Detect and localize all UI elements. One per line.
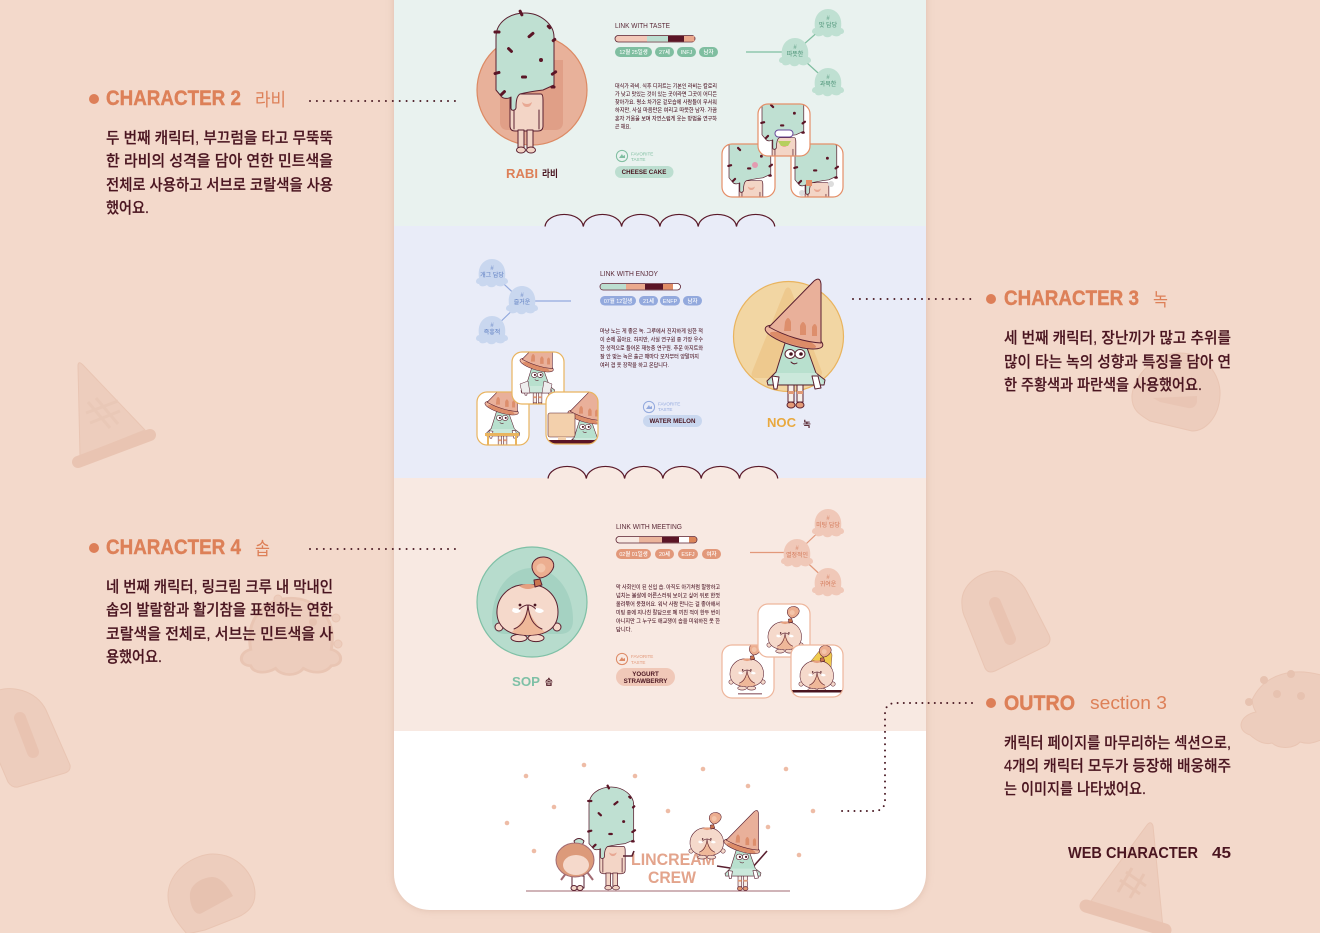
Sop favorite taste bbox=[616, 653, 675, 686]
annotation: character 4: 용했어요. bbox=[106, 648, 162, 666]
annotation: character 2: CHARACTER 2 bbox=[106, 87, 241, 110]
Noc description: 이 손에 꼽아요. 하지만, 사실 연구원 중 가장 우수 bbox=[600, 336, 703, 344]
annotation: character 2: 한 라비의 성격을 담아 연한 민트색을 bbox=[106, 152, 333, 170]
Rabi description bbox=[615, 82, 718, 130]
scallop divider: mint to lavender bbox=[545, 214, 775, 226]
section: Noc bbox=[476, 259, 844, 458]
Rabi personality scoops: 과묵한 bbox=[820, 80, 837, 88]
annotation: character 2: 전체로 사용하고 서브로 코랄색을 사용 bbox=[106, 176, 333, 194]
Sop favorite taste: YOGURT bbox=[632, 671, 659, 678]
ground line bbox=[526, 890, 790, 892]
Sop personality scoops: # bbox=[795, 546, 799, 552]
annotation: character 4: 솝의 발랄함과 활기참을 표현하는 연한 bbox=[106, 601, 333, 619]
Sop personality scoops: 귀여운 bbox=[820, 580, 837, 588]
Rabi description: 가 낮고 맛있는 것이 있는 곳이라면 그곳이 어디든 bbox=[615, 90, 717, 98]
Sop character bbox=[689, 813, 725, 859]
annotation: character 2: 라비 bbox=[255, 90, 286, 110]
Sop description: 막 사회인이 된 신입 솝. 아직도 아기처럼 말랑하고 bbox=[616, 583, 720, 591]
Rabi stats bar: LINK WITH TASTE bbox=[615, 23, 670, 30]
Sop description: 넘치는 볼살에 어른스러워 보이고 싶어 위로 한껏 bbox=[616, 592, 720, 600]
Noc portrait: NOC bbox=[767, 415, 797, 430]
Sop personality scoops: # bbox=[826, 516, 830, 522]
annotation: character 4 bbox=[89, 536, 458, 666]
page footer: 45 bbox=[1212, 845, 1231, 862]
Noc tags: 21세 bbox=[643, 297, 654, 305]
annotation: character 3 bbox=[853, 287, 1231, 394]
Sop personality scoops: 미팅 담당 bbox=[816, 521, 840, 529]
Noc portrait: 녹 bbox=[803, 419, 811, 429]
section: outro crew illustration bbox=[505, 763, 815, 891]
Rabi description: 곤 해요. bbox=[615, 122, 631, 130]
annotation: character 3: 많이 타는 녹의 성향과 특징을 담아 연 bbox=[1004, 353, 1231, 371]
confetti dots bbox=[505, 763, 815, 857]
annotation: character 3: 세 번째 캐릭터, 장난끼가 많고 추위를 bbox=[1004, 329, 1231, 347]
Sop favorite taste: STRAWBERRY bbox=[624, 678, 668, 685]
Noc expression tiles bbox=[476, 351, 599, 446]
Noc description: 마냥 노는 게 좋은 녹. 그루에서 진지하게 임한 적 bbox=[600, 327, 703, 335]
Sop tags: 여자 bbox=[707, 550, 716, 558]
scallop divider: lavender to peach bbox=[548, 466, 778, 478]
Noc description: 한 성적으로 들어온 재능충 연구원. 추운 아지트와 bbox=[600, 344, 703, 352]
Rabi personality scoops: # bbox=[826, 75, 830, 81]
Sop personality scoops: # bbox=[826, 575, 830, 581]
annotation: character 4: CHARACTER 4 bbox=[106, 536, 241, 559]
Rabi tags: 남자 bbox=[704, 48, 713, 56]
section: Sop bbox=[477, 509, 844, 698]
Noc personality scoops bbox=[476, 259, 571, 344]
Rabi description: 찾아가요. 평소 차가운 겉모습에 사람들이 무서워 bbox=[615, 98, 717, 106]
Rabi favorite taste: CHEESE CAKE bbox=[622, 169, 666, 176]
Noc personality scoops: 즐거운 bbox=[514, 298, 531, 306]
Noc tags: 07월 12일생 bbox=[604, 297, 632, 305]
section: Rabi bbox=[476, 9, 844, 198]
main page panel bbox=[394, 0, 926, 911]
Sop favorite taste: FAVORITE bbox=[631, 654, 653, 659]
Noc favorite taste bbox=[643, 401, 702, 427]
Rabi description: 대식가 라비. 식후 디저트는 기본인 라비는 칼로리 bbox=[615, 82, 717, 90]
Rabi personality scoops: 맛 담당 bbox=[819, 21, 838, 29]
Rabi portrait: RABI bbox=[506, 167, 538, 181]
Rabi favorite taste bbox=[615, 150, 674, 178]
Noc personality scoops: # bbox=[520, 293, 524, 299]
annotation: outro: OUTRO bbox=[1004, 692, 1075, 715]
Sop description: 답니다. bbox=[616, 626, 632, 634]
Noc favorite taste: WATER MELON bbox=[650, 418, 696, 425]
Sop portrait: SOP bbox=[512, 674, 540, 689]
Rabi personality scoops bbox=[746, 9, 844, 96]
Rabi favorite taste: FAVORITE bbox=[631, 152, 653, 156]
Noc description: 여러 겹 옷 장착을 하고 온답니다. bbox=[600, 361, 669, 369]
Sop description bbox=[616, 583, 720, 634]
Sop portrait: 솝 bbox=[545, 677, 553, 687]
annotation: character 4: 네 번째 캐릭터, 링크림 크루 내 막내인 bbox=[106, 578, 333, 596]
Sop tags: ESFJ bbox=[681, 552, 695, 558]
Noc favorite taste: FAVORITE bbox=[658, 402, 680, 406]
annotation: outro: 4개의 캐릭터 모두가 등장해 배웅해주 bbox=[1004, 757, 1231, 775]
Noc personality scoops: # bbox=[490, 266, 494, 272]
background decorative shapes bbox=[0, 353, 1320, 933]
Rabi tags bbox=[615, 47, 718, 57]
Sop portrait bbox=[477, 547, 587, 689]
annotation: character 3: 한 주황색과 파란색을 사용했어요. bbox=[1004, 376, 1202, 394]
Rabi expression tiles bbox=[721, 103, 844, 198]
Sop favorite taste: TASTE bbox=[631, 660, 645, 665]
Rabi description: 하지만, 사실 마음만은 여리고 따뜻한 남자. 가끔 bbox=[615, 106, 717, 114]
Rabi stats bar bbox=[615, 23, 695, 42]
annotation: outro: section 3 bbox=[1090, 693, 1167, 713]
Girl character bbox=[556, 838, 594, 890]
Rabi personality scoops: # bbox=[826, 16, 830, 22]
Sop stats bar: LINK WITH MEETING bbox=[616, 524, 682, 531]
Noc favorite taste: TASTE bbox=[658, 407, 672, 412]
Sop description: 미팅 중에 지나친 칼답으로 폐 끼친 적이 한두 번이 bbox=[616, 608, 720, 616]
annotation: character 4: 코랄색을 전체로, 서브는 민트색을 사 bbox=[106, 625, 333, 643]
Noc character bbox=[717, 810, 767, 890]
Rabi personality scoops: # bbox=[793, 45, 797, 51]
Sop description: 올려묶어 뭉쳤어요. 워낙 사람 만나는 걸 좋아해서 bbox=[616, 600, 720, 608]
crew title: LINCREAM bbox=[631, 850, 715, 869]
Noc personality scoops: 즉흥적 bbox=[484, 328, 500, 336]
annotation: outro: 캐릭터 페이지를 마무리하는 섹션으로, bbox=[1004, 734, 1231, 752]
Sop tags bbox=[616, 549, 721, 559]
annotation: outro bbox=[838, 692, 1231, 811]
Noc personality scoops: 개그 담당 bbox=[480, 271, 504, 279]
Noc description bbox=[600, 327, 703, 369]
Rabi tags: 12월 25일생 bbox=[619, 48, 648, 56]
Rabi portrait bbox=[477, 9, 587, 181]
annotation: outro: 는 이미지를 나타냈어요. bbox=[1004, 780, 1146, 798]
Sop expression tiles bbox=[722, 604, 843, 698]
Sop personality scoops bbox=[750, 509, 844, 596]
annotation: character 2: 했어요. bbox=[106, 199, 149, 217]
Noc tags bbox=[600, 296, 702, 306]
annotation: character 2 bbox=[89, 87, 458, 217]
Sop description: 아니지만 그 누구도 애교쟁이 솝을 미워하진 못 한 bbox=[616, 617, 720, 625]
Sop personality scoops: 열정적인 bbox=[786, 551, 808, 559]
annotation: character 3: CHARACTER 3 bbox=[1004, 287, 1139, 310]
Rabi portrait: 라비 bbox=[542, 168, 558, 180]
Rabi favorite taste: TASTE bbox=[631, 157, 645, 162]
Sop tags: 02월 01일생 bbox=[619, 550, 648, 558]
Noc tags: ENFP bbox=[663, 299, 678, 305]
Noc personality scoops: # bbox=[490, 323, 494, 329]
Noc stats bar bbox=[600, 271, 680, 290]
Noc description: 잘 안 맞는 녹은 출근 때마다 모자부터 양말까지 bbox=[600, 352, 699, 360]
Rabi tags: INFJ bbox=[681, 50, 692, 56]
crew title: CREW bbox=[648, 868, 697, 887]
Rabi tags: 27세 bbox=[659, 48, 670, 56]
page footer: WEB CHARACTER bbox=[1068, 845, 1198, 862]
Noc stats bar: LINK WITH ENJOY bbox=[600, 271, 658, 278]
Rabi character bbox=[587, 784, 637, 890]
Rabi description: 혼자 거울을 보며 자연스럽게 웃는 방법을 연구하 bbox=[615, 114, 718, 122]
Noc portrait bbox=[734, 279, 844, 430]
annotation: character 3: 녹 bbox=[1153, 290, 1168, 310]
annotation: character 4: 솝 bbox=[255, 539, 270, 559]
annotation: character 2: 두 번째 캐릭터, 부끄럼을 타고 무뚝뚝 bbox=[106, 129, 333, 147]
Noc tags: 남자 bbox=[688, 297, 697, 305]
Sop stats bar bbox=[616, 524, 697, 543]
crew title bbox=[631, 850, 715, 887]
Sop tags: 20세 bbox=[659, 550, 670, 558]
Rabi personality scoops: 따뜻한 bbox=[787, 50, 804, 58]
